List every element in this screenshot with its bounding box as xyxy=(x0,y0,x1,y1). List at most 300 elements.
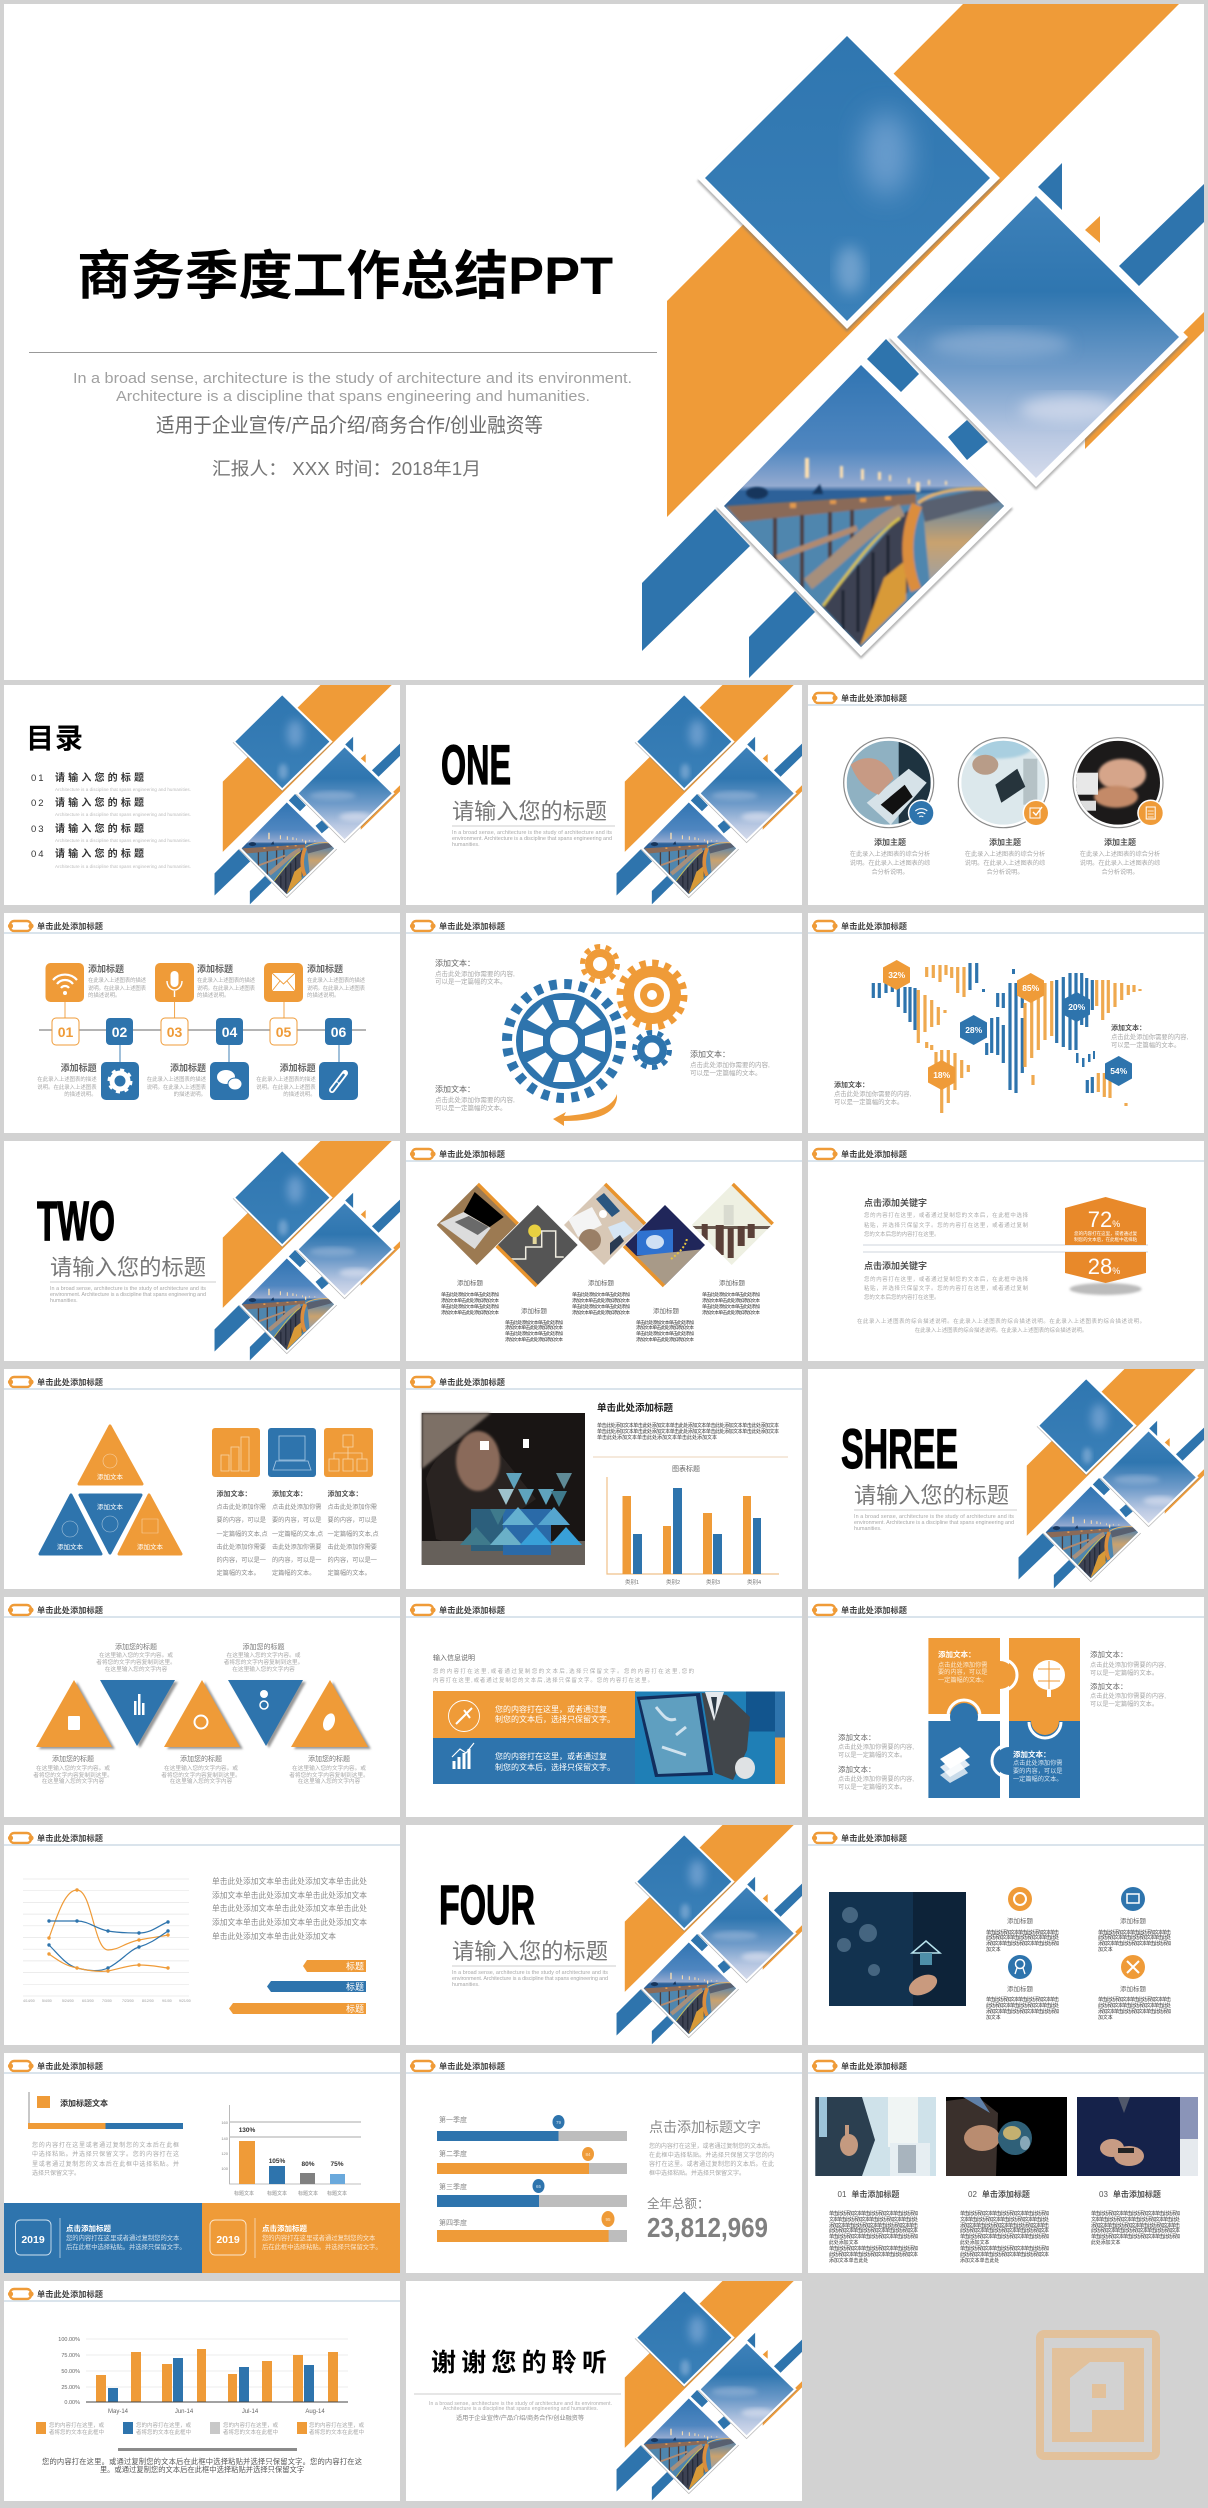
card column texts: 添加文本： xyxy=(272,1489,307,1498)
keyword block 1 xyxy=(864,1197,1029,1238)
lower step texts: 的描述说明。 xyxy=(283,1090,316,1098)
triangle shadows xyxy=(39,1682,371,1749)
info heading: 输入信息说明 xyxy=(433,1653,475,1662)
lower step texts: 的描述说明。 xyxy=(64,1090,97,1098)
orange 2019 panel: 您的内容打在这里或者通过复制您的文本 xyxy=(262,2233,376,2242)
orange 2019 panel: 后在此框中选择粘贴。并选择只保留文字。 xyxy=(262,2242,382,2251)
diamond photo: screen xyxy=(624,1205,705,1286)
header title: 单击此处添加标题 xyxy=(439,1377,505,1387)
badge shadow xyxy=(1070,1283,1142,1295)
keyword block 2: 您的内容打在这里，或者通过复制您的文本后，在此框中选择 xyxy=(864,1275,1029,1283)
map value hexagons: 85% xyxy=(1022,983,1040,993)
diamond body text: 添加文本单击此处添加添加文本 xyxy=(636,1324,694,1331)
column chart: 类别2 xyxy=(666,1578,680,1586)
map value hexagons: 28% xyxy=(965,1025,983,1035)
contents art xyxy=(215,685,400,904)
lower captions: 在这里输入您的文字内容 xyxy=(170,1777,233,1785)
right notes: 添加文本： xyxy=(1090,1649,1128,1659)
icon body text: 此处添加文本单击此处添加文本单击此处 xyxy=(1098,2002,1171,2009)
section art xyxy=(215,1141,400,1360)
photo body text 3: 单击此处添加文本单击此处添加文本单击此处添加 xyxy=(1091,2210,1180,2217)
summary body: 您的内容打在这里，或者通过复制您的文本后。 xyxy=(649,2142,774,2150)
icon: brain xyxy=(1033,1660,1065,1697)
divider lines xyxy=(863,1245,1148,1252)
photo: businessman with tablet xyxy=(635,1692,775,1784)
map notes xyxy=(834,1023,1189,1106)
split bar xyxy=(28,2123,183,2129)
upper captions: 添加您的标题 xyxy=(242,1642,284,1651)
card column texts: 定篇幅的文本。 xyxy=(272,1569,315,1577)
summary body: 容打在这里。或者通过复制您的文本后。在此 xyxy=(649,2160,774,2168)
slide header xyxy=(4,1833,400,1845)
percentage bar chart: 标题文本 xyxy=(327,2190,347,2197)
lower step texts: 的描述说明。 xyxy=(174,1090,206,1098)
contents heading: 目录 xyxy=(26,723,83,754)
map notes: 可以是一定篇幅的文本。 xyxy=(1111,1040,1180,1049)
diamond body text: 单击此处添加文本单击此处添加 xyxy=(572,1291,630,1298)
puzzle inner texts: 一定篇幅的文本。 xyxy=(938,1676,988,1684)
slide header xyxy=(406,1605,802,1617)
slide: 2019 comparison xyxy=(4,2053,400,2273)
gear notes: 添加文本： xyxy=(435,958,475,968)
slide header xyxy=(808,693,1204,705)
chart commentary: 单击此处添加文本单击此处添加文本单击此处 xyxy=(212,1876,367,1886)
diamond body text: 添加文本单击此处添加添加文本 xyxy=(505,1324,563,1331)
card column texts: 要的内容，可以是 xyxy=(272,1516,322,1524)
puzzle inner texts lower: 一定篇幅的文本。 xyxy=(1013,1775,1062,1783)
section description: In a broad sense, architecture is the study of architecture and its xyxy=(452,830,612,836)
upper step texts: 在此录入上述图表的描述 xyxy=(197,976,256,984)
line chart: 5/24/00 xyxy=(62,1999,74,2003)
gear notes: 点击此处添加你需要的内容, xyxy=(435,1095,515,1104)
percentage bar chart: 130% xyxy=(239,2127,256,2134)
upper step texts: 的描述说明。 xyxy=(197,991,229,999)
contents list: 03 xyxy=(31,824,46,835)
gear notes: 点击此处添加你需要的内容, xyxy=(435,969,515,978)
orange band xyxy=(433,1691,636,1738)
section number: ONE xyxy=(441,733,511,796)
lower step texts: 在此录入上述图表的描述 xyxy=(256,1075,316,1083)
closing english lines xyxy=(429,2401,612,2412)
photo: thumbs up xyxy=(815,2097,936,2176)
orange band: 您的内容打在这里，或者通过复 xyxy=(495,1704,607,1714)
slide header xyxy=(4,1605,400,1617)
chart legend: 者将您的文本在此框中 xyxy=(309,2428,364,2436)
badge 72 percent xyxy=(1065,1197,1146,1245)
lower captions: 者将您的文字内容复制到这里。 xyxy=(289,1771,369,1779)
circle photo 3 xyxy=(1073,738,1163,828)
right notes: 添加文本： xyxy=(1090,1681,1128,1691)
triangle cluster xyxy=(40,1426,181,1554)
lower captions: 者将您的文字内容复制到这里。 xyxy=(33,1771,113,1779)
card column texts: 添加文本： xyxy=(328,1489,362,1498)
clustered bars: 100.00% xyxy=(58,2337,80,2343)
slide header xyxy=(808,2061,1204,2073)
slide header xyxy=(808,1833,1204,1845)
photo: hand with icon triangles xyxy=(422,1413,585,1565)
header title: 单击此处添加标题 xyxy=(841,693,907,703)
slide: section SHREE xyxy=(808,1369,1204,1589)
slide: world map xyxy=(808,913,1204,1133)
circle photo 1 xyxy=(844,738,934,828)
puzzle xyxy=(928,1638,1080,1798)
badge 28 percent: 28% xyxy=(1088,1254,1120,1279)
puzzle inner texts lower xyxy=(1013,1749,1062,1783)
right notes: 可以是一定篇幅的文本。 xyxy=(1090,1700,1158,1708)
photo captions: 03 单击添加标题 xyxy=(1099,2189,1161,2199)
section art xyxy=(1019,1369,1204,1588)
progress quarter 3 xyxy=(437,2179,627,2207)
card column texts: 一定篇幅的文本,点 xyxy=(272,1530,323,1538)
chart commentary xyxy=(212,1876,367,1941)
lower step texts: 在此录入上述图表的描述 xyxy=(37,1075,97,1083)
map notes: 添加文本： xyxy=(1111,1023,1146,1032)
slide: info bands xyxy=(406,1597,802,1817)
diamond body text: 添加文本单击此处添加添加文本 xyxy=(505,1336,563,1343)
chart legend: 者将您的文本在此框中 xyxy=(136,2428,191,2436)
timeline number boxes: 03 xyxy=(167,1024,182,1040)
percentage bar chart: 标题文本 xyxy=(234,2190,254,2197)
icon body text: 加文本 xyxy=(986,2014,1001,2021)
photo body text 2: 此处添加文本 xyxy=(960,2239,989,2246)
slide: thank you xyxy=(406,2281,802,2501)
percentage bar chart: 120 xyxy=(221,2151,229,2156)
header title: 单击此处添加标题 xyxy=(841,921,907,931)
header title: 单击此处添加标题 xyxy=(439,1605,505,1615)
icon body text: 加文本 xyxy=(1098,2014,1113,2021)
circle captions: 说明。在此录入上述图表的综 xyxy=(1080,859,1160,867)
diamond photo: desk xyxy=(564,1184,645,1265)
card column texts: 一定篇幅的文本,点 xyxy=(216,1530,268,1538)
blue band: 您的内容打在这里，或者通过复 xyxy=(495,1751,607,1761)
timeline axis xyxy=(39,1029,366,1031)
diamond body text: 添加文本单击此处添加添加文本 xyxy=(702,1297,760,1304)
contents list: 02 xyxy=(31,798,46,809)
map scatter islands xyxy=(982,969,1095,1067)
slide: gears xyxy=(406,913,802,1133)
right notes xyxy=(1090,1649,1166,1708)
upper captions xyxy=(96,1642,303,1673)
photo body text 3: 添加文本单击此处添加文本单击此处添加文本单击 xyxy=(1091,2222,1180,2229)
blue 2019 panel: 您的内容打在这里或者通过复制您的文本 xyxy=(66,2233,180,2242)
header title: 单击此处添加标题 xyxy=(439,2061,505,2071)
upper step texts: 在此录入上述图表的描述 xyxy=(307,976,366,984)
chart footnote xyxy=(42,2457,363,2474)
column chart xyxy=(607,1464,779,1586)
lower captions: 在这里输入您的文字内容。或 xyxy=(292,1764,366,1772)
photo body text 2: 添加文本单击此处添加文本单击此处添加文本单击 xyxy=(960,2222,1049,2229)
column chart: 类别4 xyxy=(747,1578,761,1586)
icon captions xyxy=(1007,1916,1146,1993)
triangle icons xyxy=(68,1690,337,1732)
contents list: Architecture is a discipline that spans engineering and humanities. xyxy=(55,838,191,843)
photo body text 2: 单击此处添加文本单击此处添加文本单击此处添加 xyxy=(960,2233,1049,2240)
total value: 23,812,969 xyxy=(647,2212,768,2243)
photo captions xyxy=(838,2189,1161,2199)
triangle cluster: 添加文本 xyxy=(97,1472,124,1481)
percentage bar chart: 140 xyxy=(221,2136,229,2141)
badge 72 percent: 您的内容打在这里，或者通过复 xyxy=(1074,1230,1138,1237)
section art xyxy=(617,685,802,904)
orange gear xyxy=(620,963,684,1027)
closing heading: 谢谢您的聆听 xyxy=(431,2349,607,2377)
section description: humanities. xyxy=(50,1298,78,1304)
slide: clustered bar chart xyxy=(4,2281,400,2501)
diamond captions: 添加标题 xyxy=(521,1306,548,1315)
photo body text 1: 单击此处添加文本单击此处添加文本单击此处添加 xyxy=(829,2245,918,2252)
photo body text 1: 文本单击此处添加文本单击此处添加文本单击此处 xyxy=(829,2216,918,2223)
chart description: 单击此处添加文本单击此处添加文本单击此处添加文本单击此处添加文本单击此处添加文本 xyxy=(597,1428,779,1435)
chart commentary: 单击此处添加文本单击此处添加文本单击此处 xyxy=(212,1903,367,1913)
diamond captions xyxy=(457,1278,746,1315)
circle captions xyxy=(850,837,1160,876)
photo body text 1: 此处添加文本单击此处添加文本单击此处添加文本 xyxy=(829,2251,918,2258)
text block body: 中选择粘贴。并选择只保留文字。您的内容打在这 xyxy=(32,2150,179,2158)
blue band: 制您的文本后，选择只保留文字。 xyxy=(495,1762,615,1772)
section description: environment. Architecture is a discipline that spans engineering and xyxy=(854,1520,1014,1526)
slide header xyxy=(4,2061,400,2073)
progress quarter 2: 84 xyxy=(585,2152,591,2157)
circle captions: 合分析说明。 xyxy=(1101,868,1139,876)
chart description xyxy=(597,1422,779,1441)
photo body text 1: 单击此处添加文本单击此处添加文本单击此处添加 xyxy=(829,2210,918,2217)
map value hexagons: 20% xyxy=(1068,1002,1086,1012)
tag 1: 标题 xyxy=(346,1960,364,1972)
left notes xyxy=(838,1732,914,1791)
diamond body text: 单击此处添加文本单击此处添加 xyxy=(636,1330,694,1337)
lower captions: 在这里输入您的文字内容。或 xyxy=(164,1764,238,1772)
lower step texts: 添加标题 xyxy=(280,1062,316,1073)
section title: 请输入您的标题 xyxy=(50,1255,206,1280)
diamond captions: 添加标题 xyxy=(457,1278,484,1287)
progress quarter 1: 79 xyxy=(556,2120,561,2125)
large blue gear xyxy=(507,984,621,1098)
card column texts: 的内容，可以是一 xyxy=(328,1556,377,1564)
diamond body text xyxy=(441,1291,760,1343)
chart description: 单击此处添加文本单击此处添加文本单击此处添加文本 xyxy=(597,1434,717,1441)
icon body text: 添加文本单击此处添加文本单击此处添加 xyxy=(1098,1940,1171,1947)
icon body text: 加文本 xyxy=(1098,1946,1113,1953)
keyword block 2: 粘贴，并选择只保留文字。您的内容打在这里，或者通过复制 xyxy=(864,1284,1028,1292)
percentage bar chart: 标题文本 xyxy=(267,2190,287,2197)
cover english line 2: Architecture is a discipline that spans engineering and humanities. xyxy=(116,388,590,405)
tag 2: 标题 xyxy=(346,1981,364,1992)
icon captions: 添加标题 xyxy=(1120,1984,1146,1993)
header title: 单击此处添加标题 xyxy=(841,2061,907,2071)
section description: humanities. xyxy=(452,842,480,848)
section description: In a broad sense, architecture is the study of architecture and its xyxy=(50,1286,206,1292)
card column texts: 定篇幅的文本。 xyxy=(328,1569,371,1577)
slide: section ONE xyxy=(406,685,802,905)
section description xyxy=(452,1970,608,1988)
timeline number boxes: 04 xyxy=(222,1024,237,1040)
gear notes: 可以是一定篇幅的文本。 xyxy=(435,1103,506,1112)
line chart: 7/23/00 xyxy=(122,1999,134,2003)
left notes: 可以是一定篇幅的文本。 xyxy=(838,1783,906,1791)
photo body text 3: 此处添加文本 xyxy=(1091,2239,1120,2246)
clustered bars: 75.00% xyxy=(61,2353,80,2359)
card column texts: 击此处添加你需要 xyxy=(272,1543,322,1551)
info paragraph: 内容打在这里,或者通过复制您的文本后,选择只保留文字。您的内容打在这里。 xyxy=(433,1676,653,1684)
text block title: 添加标题文本 xyxy=(60,2098,108,2108)
icon body text: 单击此处添加文本单击此处添加文本单击 xyxy=(986,1929,1059,1936)
gear notes: 点击此处添加你需要的内容, xyxy=(690,1060,770,1069)
chart footnote: 里。或通过复制您的文本后在此框中选择粘贴并选择只保留文字 xyxy=(100,2465,304,2474)
reporter and date: 汇报人： XXX 时间：2018年1月 xyxy=(212,459,481,479)
diamond captions: 添加标题 xyxy=(588,1278,614,1287)
photo body text 3 xyxy=(1091,2210,1180,2246)
gear notes: 添加文本： xyxy=(435,1084,475,1094)
slide: three photos xyxy=(808,2053,1204,2273)
chart commentary: 添加文本单击此处添加文本单击此处添加文本 xyxy=(212,1890,367,1900)
keyword block 2: 点击添加关键字 xyxy=(864,1260,927,1271)
upper step texts: 添加标题 xyxy=(197,963,233,974)
photo: businessman with glowing house xyxy=(829,1892,966,2006)
diamond body text: 单击此处添加文本单击此处添加 xyxy=(441,1303,499,1310)
percentage bar chart: 80% xyxy=(301,2161,315,2168)
line chart: 9/1/00 xyxy=(162,1999,172,2003)
progress quarter 3: 第三季度 xyxy=(439,2182,467,2191)
header title: 单击此处添加标题 xyxy=(37,921,103,931)
section title: 请输入您的标题 xyxy=(854,1483,1009,1508)
percentage bar chart xyxy=(221,2105,361,2197)
section number: SHREE xyxy=(841,1417,958,1480)
right notes: 点击此处添加你需要的内容, xyxy=(1090,1692,1166,1700)
map value hexagons: 54% xyxy=(1110,1066,1128,1076)
closing art xyxy=(617,2281,802,2500)
keyword block 1: 您的内容打在这里，或者通过复制您的文本后，在此框中选择 xyxy=(864,1211,1029,1219)
keyword block 1: 点击添加关键字 xyxy=(864,1197,927,1208)
progress quarter 4 xyxy=(437,2211,627,2242)
diamond body text: 添加文本单击此处添加添加文本 xyxy=(572,1297,630,1304)
gear notes: 添加文本： xyxy=(690,1049,730,1059)
diamond captions: 添加标题 xyxy=(653,1306,680,1315)
slide header xyxy=(4,1377,400,1389)
map notes: 添加文本： xyxy=(834,1080,869,1089)
photo body text 2: 单击此处添加文本单击此处添加文本单击此处添加 xyxy=(960,2210,1049,2217)
slide: triangle row xyxy=(4,1597,400,1817)
photo body text 2: 添加文本单击此处 xyxy=(960,2257,999,2264)
right notes: 点击此处添加你需要的内容, xyxy=(1090,1661,1166,1669)
upper captions: 者将您的文字内容复制到这里。 xyxy=(96,1658,176,1666)
diamond body text: 单击此处添加文本单击此处添加 xyxy=(441,1291,499,1298)
icon card: laptop xyxy=(268,1428,316,1477)
diamond body text: 单击此处添加文本单击此处添加 xyxy=(572,1303,630,1310)
chart legend: 者将您的文本在此框中 xyxy=(223,2428,278,2436)
card column texts: 要的内容，可以是 xyxy=(216,1516,266,1524)
watermark stamp xyxy=(1040,2334,1156,2456)
circle captions: 合分析说明。 xyxy=(871,868,909,876)
percentage bar chart: 标题文本 xyxy=(298,2190,318,2197)
section art xyxy=(617,1825,802,2044)
icon body text: 此处添加文本单击此处添加文本单击此处 xyxy=(1098,1934,1171,1941)
keyword block 1: 粘贴，并选择只保留文字。您的内容打在这里，或者通过复制 xyxy=(864,1221,1028,1229)
diamond body text: 添加文本单击此处添加添加文本 xyxy=(702,1309,760,1316)
contents list: 请输入您的标题 xyxy=(55,796,144,809)
chart legend: 者将您的文本在此框中 xyxy=(49,2428,104,2436)
info paragraph: 您的内容打在这里,或者通过复制您的文本后,选择只保留文字。您的内容打在这里,您的 xyxy=(433,1667,694,1675)
slide: contents xyxy=(4,685,400,905)
upper step texts: 添加标题 xyxy=(307,963,343,974)
section description: In a broad sense, architecture is the study of architecture and its xyxy=(854,1514,1014,1520)
footer text xyxy=(857,1317,1145,1334)
contents list: Architecture is a discipline that spans engineering and humanities. xyxy=(55,787,191,792)
section description: environment. Architecture is a discipline that spans engineering and xyxy=(452,1976,608,1982)
circle photo 2 xyxy=(958,735,1048,828)
footer text: 在此录入上述图表的综合描述说明。在此录入上述图表的综合描述说明。在此录入上述图表的综合描述说明。 xyxy=(857,1317,1145,1325)
contents list xyxy=(31,771,191,869)
badge 72 percent: 制您的文本后，在此框中选择粘 xyxy=(1074,1236,1138,1243)
upper captions: 在这里输入您的文字内容。或 xyxy=(99,1651,173,1659)
slide: photo with four icons xyxy=(808,1825,1204,2045)
card column texts: 的内容，可以是一 xyxy=(272,1556,322,1564)
badge 2 check xyxy=(1022,800,1050,826)
icon: wifi tile xyxy=(46,963,84,1002)
photo body text 1: 添加文本单击此处添加文本单击此处添加文本单击 xyxy=(829,2222,918,2229)
icon card: hierarchy xyxy=(324,1428,373,1477)
map notes: 点击此处添加你需要的内容, xyxy=(1111,1032,1189,1041)
blue band xyxy=(433,1738,636,1784)
icon captions: 添加标题 xyxy=(1007,1916,1034,1925)
puzzle inner texts xyxy=(938,1649,988,1684)
upper captions: 在这里输入您的文字内容 xyxy=(105,1665,168,1673)
upper step texts: 说明。在此录入上述图表 xyxy=(197,984,256,992)
photo body text 2: 此处添加文本单击此处添加文本单击此处添加文本 xyxy=(960,2251,1049,2258)
timeline number boxes: 02 xyxy=(112,1024,127,1040)
upper captions: 在这里输入您的文字内容 xyxy=(232,1665,295,1673)
header title: 单击此处添加标题 xyxy=(37,1605,103,1615)
summary heading: 点击添加标题文字 xyxy=(649,2119,761,2135)
gear notes: 可以是一定篇幅的文本。 xyxy=(690,1068,762,1077)
grey divider bar xyxy=(118,2448,297,2451)
clustered bars: 0.00% xyxy=(64,2400,80,2406)
text block body: 您的内容打在这里或者通过复制您的文本后在此框 xyxy=(32,2141,179,2149)
photo body text 3: 此处添加文本单击此处添加文本单击此处添加文本 xyxy=(1091,2227,1180,2234)
header title: 单击此处添加标题 xyxy=(37,2289,103,2299)
lower captions: 在这里输入您的文字内容 xyxy=(298,1777,361,1785)
card column texts: 添加文本： xyxy=(216,1489,252,1498)
chart commentary: 单击此处添加文本单击此处添加文本 xyxy=(212,1931,336,1941)
triangle row xyxy=(36,1680,368,1747)
puzzle inner texts: 添加文本： xyxy=(938,1649,976,1659)
line chart: 7/3/00 xyxy=(102,1999,112,2003)
slide: photo and column chart xyxy=(406,1369,802,1589)
upper step texts: 说明。在此录入上述图表 xyxy=(307,984,366,992)
slide: triangle cards xyxy=(4,1369,400,1589)
left notes: 点击此处添加你需要的内容, xyxy=(838,1775,914,1783)
line chart: 4/14/00 xyxy=(23,1999,35,2003)
text block body: 里或者通过复制您的文本后在此框中选择粘贴。并 xyxy=(32,2160,179,2168)
card column texts: 一定篇幅的文本,点 xyxy=(328,1530,379,1538)
icon body text: 添加文本单击此处添加文本单击此处添加 xyxy=(986,1940,1059,1947)
photo body text 1: 此处添加文本 xyxy=(829,2239,858,2246)
diamond photo: laptop xyxy=(437,1184,518,1265)
icon card: bar chart xyxy=(212,1428,260,1477)
clustered bars: Jun-14 xyxy=(175,2409,194,2415)
upper captions: 在这里输入您的文字内容。或 xyxy=(227,1651,301,1659)
closing english lines: In a broad sense, architecture is the study of architecture and its environment. xyxy=(429,2401,612,2407)
diamond body text: 添加文本单击此处添加添加文本 xyxy=(572,1309,630,1316)
slide: cover xyxy=(4,4,1204,680)
slide header xyxy=(808,1605,1204,1617)
text block body xyxy=(32,2141,179,2177)
connectors xyxy=(65,1002,339,1062)
slide: three circles xyxy=(808,685,1204,905)
line chart: 9/21/00 xyxy=(179,1999,191,2003)
progress quarter 4: 第四季度 xyxy=(439,2218,467,2227)
icon: envelope tile xyxy=(264,963,303,1002)
section number: TWO xyxy=(37,1189,115,1252)
